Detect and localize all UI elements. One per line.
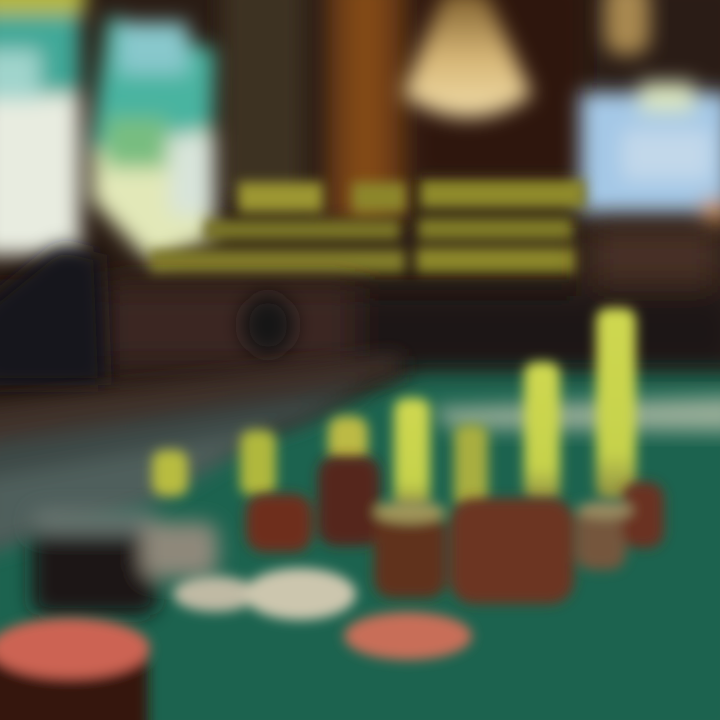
table rail [0, 355, 400, 555]
pale table line [430, 396, 720, 432]
chip stack 2 [318, 456, 380, 546]
wood pillars [222, 0, 720, 220]
chip stack 3 [374, 514, 446, 598]
bar 7 [596, 308, 636, 500]
chip stack 5 [576, 504, 626, 570]
bar 3 [328, 416, 368, 464]
small ceiling light [604, 0, 650, 55]
foreground red chip stack [0, 618, 150, 720]
left chip stack [32, 510, 218, 615]
red flat chip [344, 612, 472, 660]
bar 6 [524, 362, 560, 502]
top right blue panel [580, 82, 720, 226]
green felt table [0, 372, 720, 720]
chip stacks [246, 456, 664, 604]
chip tops [374, 501, 446, 523]
bar 1 [152, 450, 188, 496]
dark back room [0, 228, 720, 375]
bar 4 [394, 398, 430, 510]
chart: yellow bars on chips [152, 308, 636, 510]
white flat chips [173, 568, 356, 620]
left cards [0, 0, 215, 262]
bar 5 [454, 424, 488, 508]
chip stack 1 [246, 494, 312, 552]
blurred yellow headline [150, 180, 585, 274]
bar 2 [240, 430, 276, 496]
chip stack 4 [450, 498, 574, 604]
seated figures [0, 245, 294, 385]
hanging lamp [402, 0, 532, 118]
chip stack 6 [622, 482, 664, 548]
